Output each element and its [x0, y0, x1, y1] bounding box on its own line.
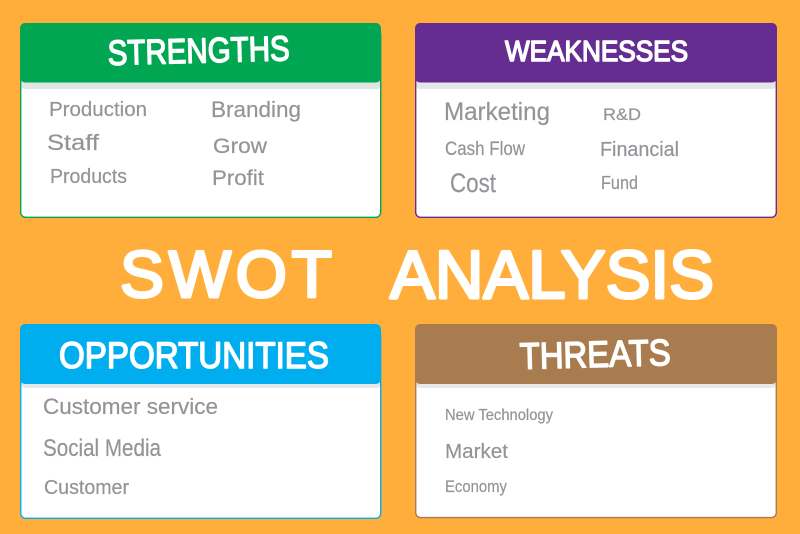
text: staff: Staff	[47, 130, 100, 155]
panel: opportunities	[20, 324, 381, 518]
heading: threats: THREATS	[519, 332, 671, 377]
heading: weaknesses: WEAKNESSES	[505, 36, 688, 68]
panel: weaknesses	[415, 23, 777, 217]
text: customer: Customer	[44, 477, 129, 499]
text: economy: Economy	[445, 477, 507, 496]
text: cost: Cost	[450, 168, 496, 198]
title	[120, 237, 714, 313]
text: market: Market	[445, 441, 508, 463]
text: customer service: Customer service	[43, 394, 218, 419]
panel: strengths	[20, 23, 381, 217]
title: ANALYSIS	[390, 237, 714, 313]
panel: threats	[415, 324, 777, 518]
text: profit: Profit	[212, 167, 264, 190]
text: grow: Grow	[213, 135, 268, 158]
text: r&d: R&D	[603, 105, 641, 124]
text: financial: Financial	[600, 139, 679, 161]
text: fund: Fund	[601, 173, 638, 193]
text: new technology: New Technology	[445, 407, 553, 424]
text: marketing: Marketing	[444, 98, 550, 126]
text: social media: Social Media	[43, 435, 162, 462]
text: production: Production	[49, 99, 147, 121]
heading: strengths: STRENGTHS	[107, 29, 290, 73]
text: branding: Branding	[211, 97, 301, 122]
text: cash flow: Cash Flow	[445, 139, 525, 160]
title: SWOT	[120, 237, 332, 311]
heading: opportunities: OPPORTUNITIES	[59, 335, 329, 376]
text: products: Products	[50, 166, 127, 188]
